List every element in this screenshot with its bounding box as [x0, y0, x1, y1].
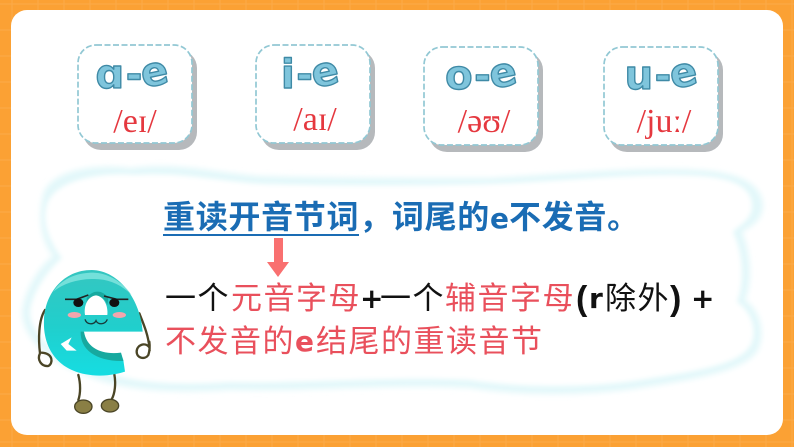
rule line 2: e: [295, 325, 314, 358]
rule line 1: r: [589, 282, 603, 315]
phonetic: /əʊ/: [458, 103, 511, 140]
character: letter e mascot: [38, 270, 151, 414]
card: a-e: [77, 44, 197, 150]
phonetic: /aɪ/: [293, 101, 337, 138]
phonetic: /eɪ/: [113, 103, 157, 140]
card: i-e: [255, 44, 375, 150]
rule line 1: ): [670, 280, 683, 318]
card: u-e: [603, 46, 723, 152]
rule line 1: 一个: [380, 281, 445, 316]
shoes: [75, 400, 92, 413]
heading: ，词尾的e不发音。: [359, 199, 640, 235]
letters: u-e: [625, 48, 703, 99]
e body: [44, 270, 143, 376]
rule line 1: 元音字母: [231, 281, 361, 316]
legs and arms: [39, 310, 150, 400]
rule line 1: (: [576, 280, 589, 318]
rule line 1: [165, 280, 714, 318]
eyes: [65, 295, 88, 299]
rule line 1: 除外: [605, 281, 670, 316]
rule line 1: +: [360, 282, 383, 315]
rule line 1: +: [691, 282, 714, 315]
top highlight: [53, 273, 132, 295]
heading: [163, 199, 640, 236]
heading: 重读开音节词: [163, 199, 359, 235]
arrow: [267, 238, 289, 277]
rule line 2: 不发音的: [165, 324, 295, 359]
rule line 1: 一个: [165, 281, 230, 316]
rule line 2: 结尾的重读音节: [316, 324, 544, 359]
card: o-e: [423, 46, 543, 152]
inner band: [81, 332, 123, 361]
highlight: [61, 337, 77, 351]
rule line 2: [165, 324, 544, 359]
phonetic: /juː/: [637, 103, 692, 140]
mouth: [85, 319, 107, 324]
rule line 1: 辅音字母: [445, 281, 575, 316]
cloud panel: [22, 166, 763, 394]
letters: o-e: [445, 48, 522, 99]
letters: ɑ-e: [96, 47, 174, 98]
cheeks: [68, 312, 81, 318]
letters: i-e: [281, 47, 344, 98]
face hole: [87, 292, 108, 305]
